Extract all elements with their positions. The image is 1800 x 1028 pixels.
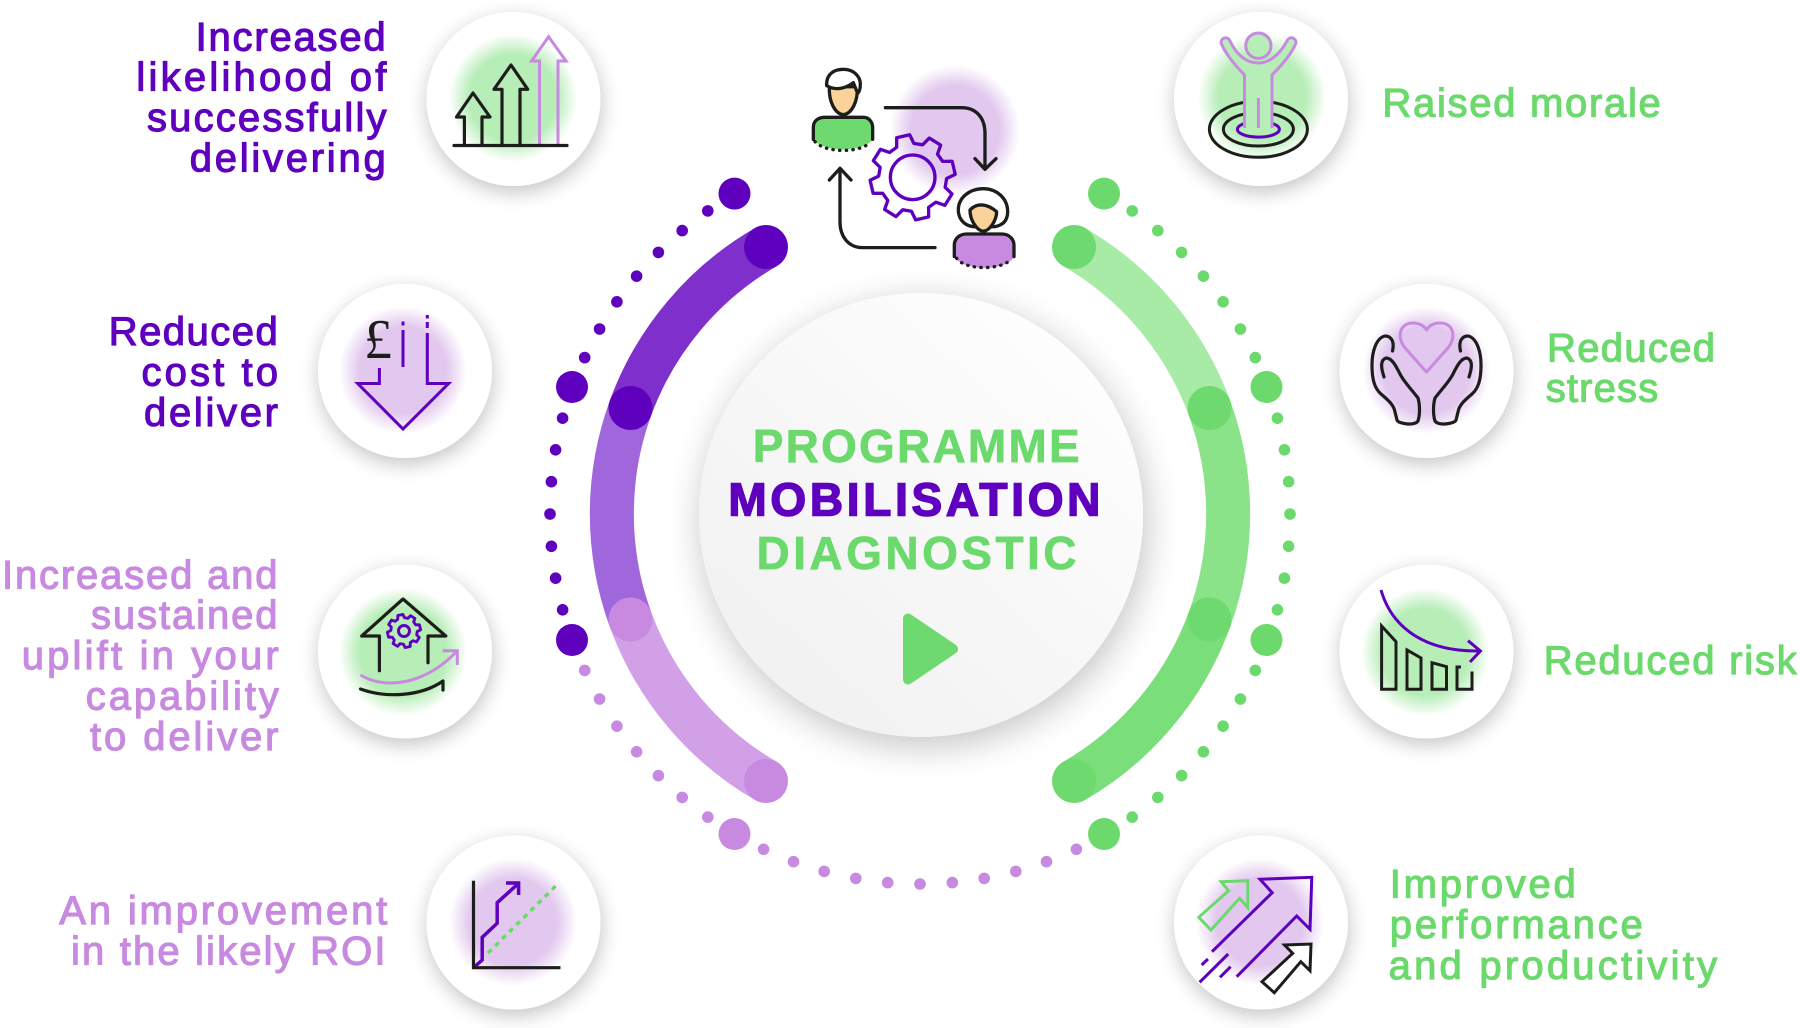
text: capability uplift: capability — [86, 674, 279, 718]
text: increased likelihood: delivering — [190, 137, 386, 181]
text: capability uplift: uplift in your — [22, 634, 279, 678]
text: improved performance — [1389, 863, 1717, 988]
badge circle — [318, 564, 492, 738]
panel: reduced risk — [1340, 564, 1514, 738]
thick arc: right green — [1052, 225, 1232, 803]
icon: falling bars — [1361, 588, 1489, 716]
text: raised morale: Raised morale — [1382, 81, 1661, 125]
icon: ROI graph — [449, 858, 577, 986]
panel: increased likelihood — [426, 12, 600, 186]
panel: likely ROI — [426, 836, 600, 1010]
text: capability uplift — [2, 553, 279, 759]
text: likely ROI — [59, 889, 387, 973]
badge circle — [1174, 836, 1348, 1010]
badge circle — [426, 836, 600, 1010]
dotted ring: light purple dots — [579, 665, 1082, 890]
text: reduced stress: Reduced — [1547, 327, 1715, 371]
title: programme mobilisation diagnostic: DIAGNOSTIC — [756, 527, 1076, 579]
text: reduced stress: stress — [1546, 367, 1658, 411]
icon: house with gear — [339, 588, 467, 716]
badge circle — [426, 12, 600, 186]
text: reduced cost — [109, 310, 278, 435]
icon: rising diagonal arrows — [1196, 858, 1324, 993]
title: programme mobilisation diagnostic: PROGRAMME — [753, 420, 1080, 472]
text: increased likelihood: successfully — [147, 96, 386, 140]
dotted ring: green dots — [1088, 178, 1296, 850]
text: likely ROI: in the likely ROI — [71, 929, 386, 973]
text: reduced cost: cost to — [142, 351, 278, 395]
title: programme mobilisation diagnostic: MOBILISATION — [728, 474, 1100, 526]
text: reduced cost: Reduced — [109, 310, 278, 354]
panel: reduced stress — [1340, 284, 1514, 458]
play button — [908, 618, 953, 680]
text: improved performance: and productivity — [1389, 944, 1717, 988]
badge circle — [1340, 564, 1514, 738]
panel: reduced cost — [318, 284, 492, 458]
icon: pound and down arrow: £ — [364, 309, 392, 371]
badge circle — [318, 284, 492, 458]
text: improved performance: Improved — [1390, 863, 1576, 907]
text: reduced stress — [1546, 327, 1715, 411]
panel: capability uplift — [318, 564, 492, 738]
text: capability uplift: sustained — [91, 594, 278, 638]
badge circle — [1340, 284, 1514, 458]
icon: person on target — [1198, 33, 1326, 161]
dotted ring: dark purple dots — [544, 178, 750, 656]
text: capability uplift: to deliver — [90, 715, 278, 759]
text: increased likelihood: likelihood of — [136, 56, 387, 100]
central hub circle — [699, 293, 1143, 737]
icon: hands and heart — [1362, 306, 1490, 434]
title: programme mobilisation diagnostic — [728, 420, 1100, 579]
text: increased likelihood: Increased — [196, 16, 386, 60]
badge circle — [1174, 12, 1348, 186]
text: capability uplift: Increased and — [2, 553, 278, 597]
icon: pound and down arrow — [339, 306, 467, 434]
icon: people and gear cycle — [813, 65, 1020, 268]
panel: improved performance — [1174, 836, 1348, 1010]
panel: raised morale — [1174, 12, 1348, 186]
icon: rising arrows — [449, 34, 577, 162]
thick arc: left purple — [608, 225, 788, 803]
text: likely ROI: An improvement — [59, 889, 387, 933]
text: increased likelihood — [136, 16, 387, 181]
text: reduced cost: deliver — [144, 391, 278, 435]
text: reduced risk: Reduced risk — [1544, 639, 1798, 683]
text: improved performance: performance — [1390, 903, 1643, 947]
